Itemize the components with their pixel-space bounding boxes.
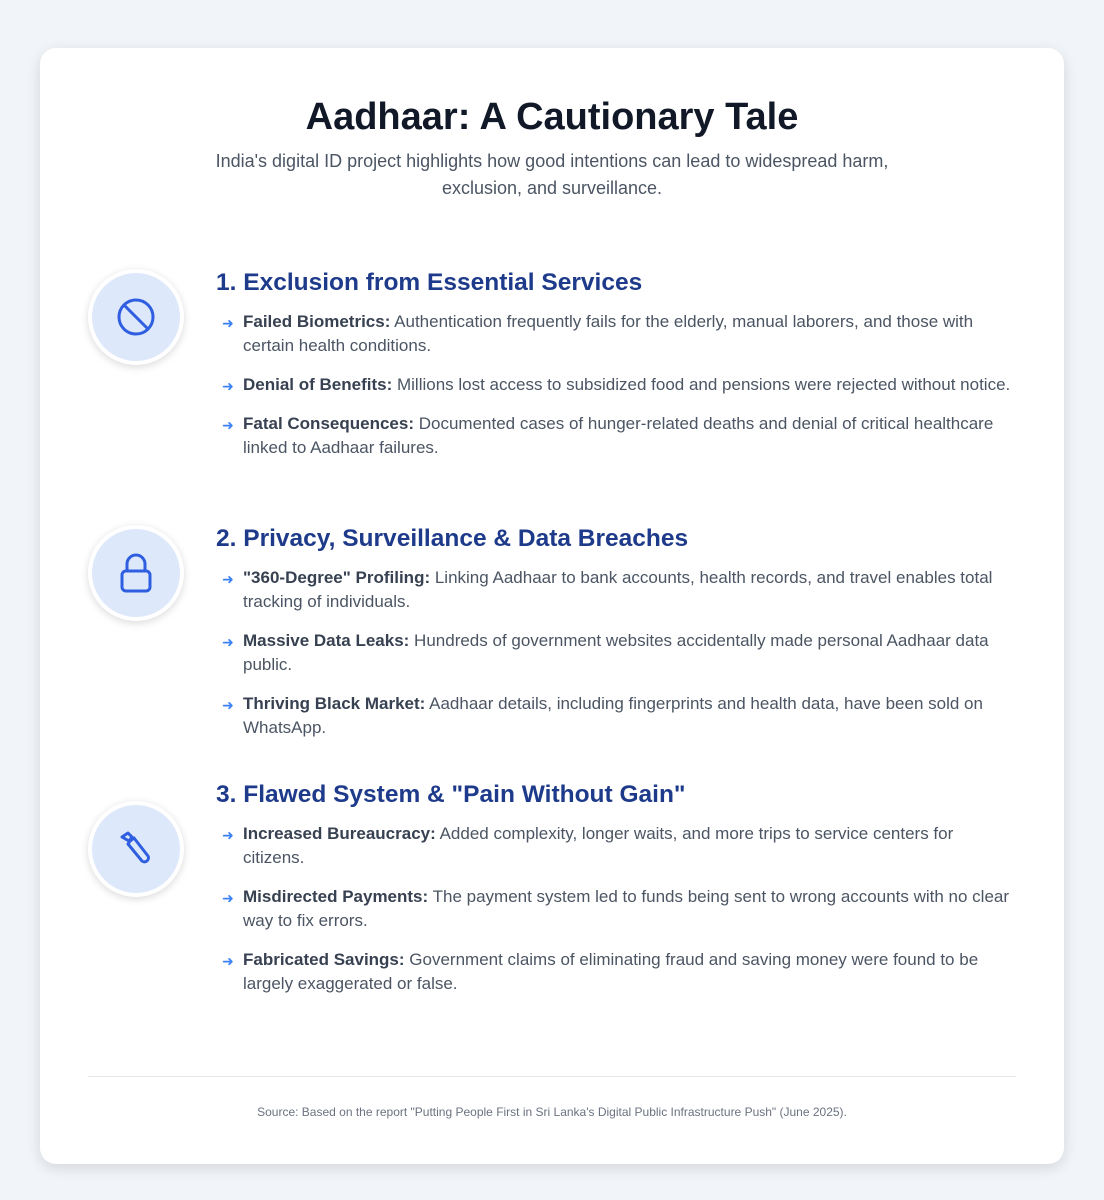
bullets: Fabricated Savings: Government claims of eliminating fraud and saving money were found to be largely exaggerated or false. [243, 950, 978, 993]
bullets [222, 568, 992, 737]
heading: 3. Flawed System & "Pain Without Gain" [216, 781, 686, 808]
heading: 2. Privacy, Surveillance & Data Breaches [216, 525, 688, 552]
heading: 1. Exclusion from Essential Services [216, 269, 642, 296]
bullets: "360-Degree" Profiling: Linking Aadhaar to bank accounts, health records, and travel enables total tracking of individuals. [243, 568, 992, 611]
source footer: Source: Based on the report "Putting People First in Sri Lanka's Digital Public Infrastructure Push" (June 2025). [257, 1105, 847, 1119]
icon: lock [88, 525, 184, 621]
icon: prohibited [88, 269, 184, 365]
bullets: Fatal Consequences: Documented cases of hunger-related deaths and denial of critical healthcare linked to Aadhaar failures. [243, 414, 993, 457]
bullets: Failed Biometrics: Authentication frequently fails for the elderly, manual laborers, and those with certain health conditions. [243, 312, 973, 355]
bullets: Increased Bureaucracy: Added complexity, longer waits, and more trips to service centers for citizens. [243, 824, 953, 867]
icon: tool [88, 801, 184, 897]
subtitle: India's digital ID project highlights how good intentions can lead to widespread harm, exclusion, and surveillance. [216, 151, 888, 198]
bullets: Denial of Benefits: Millions lost access to subsidized food and pensions were rejected without notice. [243, 375, 1010, 394]
bullets: Massive Data Leaks: Hundreds of government websites accidentally made personal Aadhaar data public. [243, 631, 989, 674]
bullets: Thriving Black Market: Aadhaar details, including fingerprints and health data, have been sold on WhatsApp. [243, 694, 983, 737]
panel: exclusion [86, 268, 1010, 457]
bullets [222, 824, 1009, 993]
title: Aadhaar: A Cautionary Tale [306, 96, 798, 138]
panel: flawed system [86, 781, 1009, 993]
panel: privacy [86, 524, 992, 737]
bullets: Misdirected Payments: The payment system led to funds being sent to wrong accounts with no clear way to fix errors. [243, 887, 1009, 930]
bullets [222, 312, 1010, 457]
